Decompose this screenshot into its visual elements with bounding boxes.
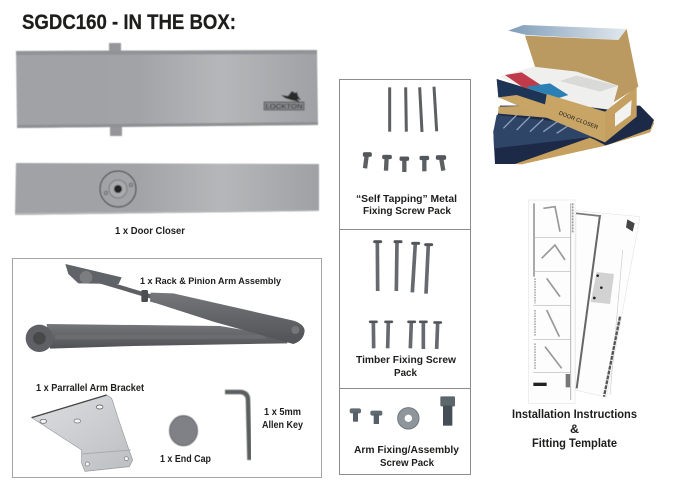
label: self tapping pack: “Self Tapping” Metal bbox=[356, 194, 457, 205]
arm fixing screws bbox=[350, 396, 455, 429]
title: SGDC160 - IN THE BOX: bbox=[22, 11, 236, 34]
panel: arm assembly bbox=[12, 258, 322, 478]
door closer: top view bbox=[16, 43, 318, 136]
label: installation instructions: Installation Instructions bbox=[512, 409, 637, 421]
label: bracket: 1 x Parrallel Arm Bracket bbox=[36, 383, 145, 394]
label: arm fixing pack: Screw Pack bbox=[380, 458, 434, 469]
instructions and fitting template bbox=[528, 200, 640, 403]
fitting template bbox=[575, 211, 640, 397]
door closer: underside view bbox=[15, 163, 319, 215]
box inside back bbox=[525, 29, 638, 107]
label: end cap: 1 x End Cap bbox=[160, 454, 211, 465]
label: allen key: 1 x 5mm bbox=[264, 407, 301, 418]
contents bbox=[500, 67, 618, 110]
end cap bbox=[170, 416, 198, 446]
self tapping screws bbox=[363, 87, 446, 172]
lower box bbox=[493, 106, 654, 164]
instruction sheet bbox=[528, 200, 575, 403]
logo: Lockton: LOCKTON bbox=[266, 104, 302, 110]
product box photo bbox=[493, 25, 654, 164]
lid bbox=[508, 25, 627, 40]
timber screws bbox=[369, 240, 442, 349]
label: timber pack bbox=[356, 355, 456, 379]
box front bbox=[497, 79, 605, 142]
label: allen key: Allen Key bbox=[262, 420, 303, 431]
label: timber pack: Pack bbox=[394, 368, 417, 379]
printed box text: DOOR CLOSER bbox=[558, 111, 599, 131]
label: arm fixing pack bbox=[354, 445, 459, 469]
label: door closer: 1 x Door Closer bbox=[115, 226, 185, 237]
panel: screw packs bbox=[339, 80, 471, 474]
rack and pinion arm bbox=[26, 264, 305, 352]
label: self tapping pack bbox=[356, 194, 457, 217]
label: installation instructions: Fitting Template bbox=[532, 438, 617, 450]
label: installation instructions bbox=[512, 409, 637, 450]
logo: Lockton bbox=[264, 91, 304, 110]
box end bbox=[605, 87, 637, 142]
parallel arm bracket bbox=[32, 395, 133, 471]
label: rack and pinion: 1 x Rack & Pinion Arm Assembly bbox=[140, 276, 282, 287]
label: installation instructions: & bbox=[570, 424, 579, 436]
label: arm fixing pack: Arm Fixing/Assembly bbox=[354, 445, 459, 456]
label: allen key bbox=[262, 407, 303, 431]
label: self tapping pack: Fixing Screw Pack bbox=[363, 206, 451, 217]
label: timber pack: Timber Fixing Screw bbox=[356, 355, 456, 366]
allen key bbox=[225, 392, 250, 460]
